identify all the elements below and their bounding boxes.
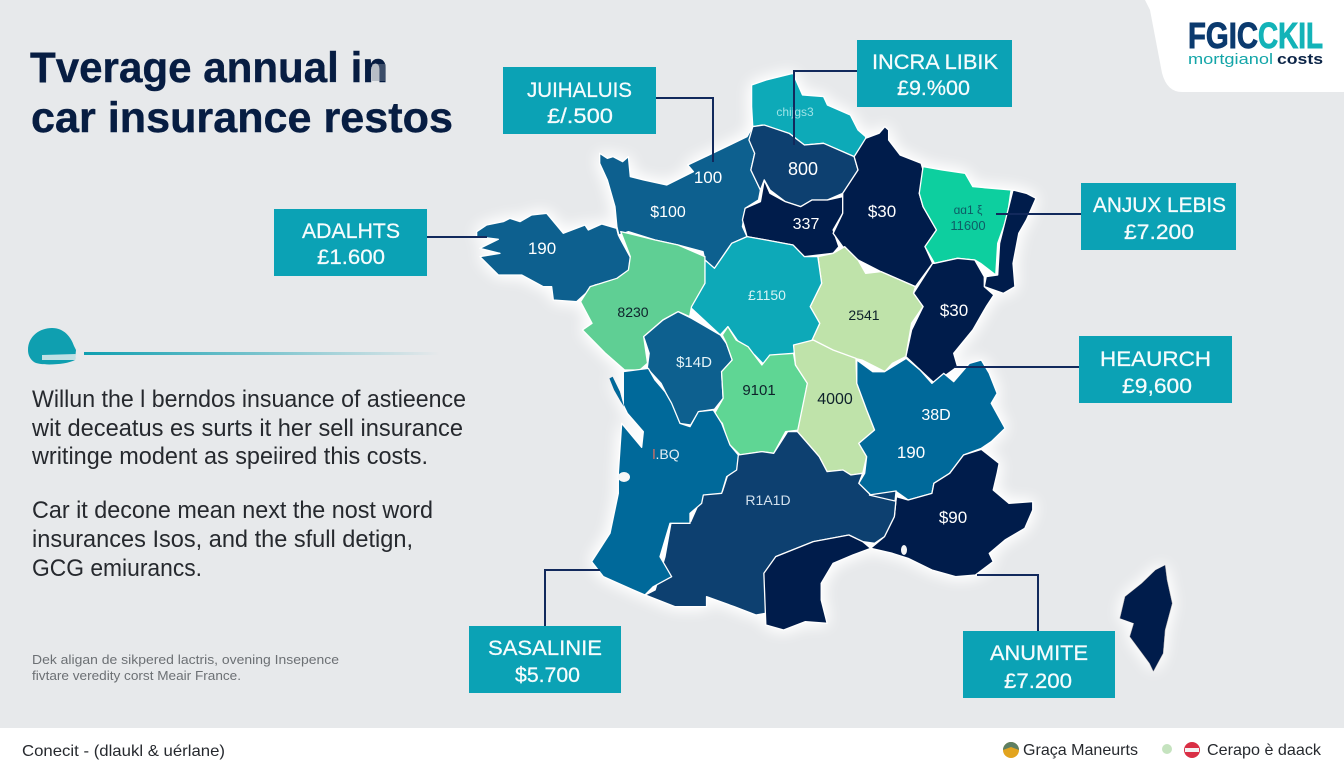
region: northwest blue: 100 — [694, 168, 722, 187]
region: centre navy — [742, 180, 843, 257]
logo panel: CKIL — [1258, 15, 1323, 56]
logo panel — [1145, 0, 1344, 92]
legend: footer icons and labels: Graça Maneurts — [1023, 742, 1138, 759]
region: southwest blue — [592, 368, 738, 595]
region: Corsica — [1120, 565, 1172, 672]
footnote: fivtare veredity corst Meair France. — [32, 668, 241, 683]
legend: footer icons and labels — [1003, 742, 1322, 759]
region: Limousin blue: $14D — [676, 354, 712, 371]
region: light green east centre: 2541 — [848, 307, 880, 323]
region: teal centre: £1150 — [748, 287, 786, 303]
intro paragraph: Willun the l berndos insuance of astieence — [32, 386, 466, 413]
region: teal centre — [690, 237, 822, 365]
logo panel: FGIC — [1188, 15, 1258, 56]
intro paragraph: writinge modent as speiired this costs. — [31, 443, 428, 470]
callout: SASALINIE — [469, 570, 621, 693]
region: Jura navy: $30 — [940, 301, 968, 320]
region: Alsace navy — [984, 190, 1036, 293]
region: Roussillon navy — [764, 535, 871, 630]
region: northeast navy: $30 — [868, 202, 896, 221]
region: central green: 9101 — [742, 382, 776, 399]
region: west green: 8230 — [617, 304, 649, 320]
region: Rhone blue — [857, 358, 1005, 500]
region: Oleron island strip — [609, 377, 624, 407]
region: Rhone blue: 190 — [897, 443, 925, 462]
region: Limousin blue — [644, 312, 732, 425]
map of France — [477, 73, 1172, 672]
region: light green east centre — [810, 247, 923, 372]
footer bar — [0, 728, 1344, 768]
title: car insurance restos — [31, 94, 453, 142]
second paragraph: GCG emiurancs. — [32, 555, 202, 582]
region: southwest blue: l.BQ — [652, 446, 680, 462]
title: Tverage annual in — [30, 44, 388, 92]
region: northwest blue — [600, 127, 760, 268]
region: southeast navy — [871, 449, 1033, 577]
callout: INCRA LIBIK: £9.%00 — [897, 77, 970, 100]
region: Paris north — [749, 125, 858, 207]
region: Rhone blue: 38D — [921, 407, 951, 424]
region: Brittany — [477, 213, 633, 302]
callout: ANJUX LEBIS — [996, 183, 1236, 250]
callout: ANJUX LEBIS: £7.200 — [1124, 221, 1194, 244]
callout: ANJUX LEBIS: ANJUX LEBIS — [1093, 194, 1226, 217]
footnote: Dek aligan de sikpered lactris, ovening Insepence — [32, 652, 339, 667]
callout: ADALHTS: ADALHTS — [302, 220, 400, 243]
callout: ADALHTS: £1.600 — [317, 246, 385, 269]
region: central light green — [794, 340, 875, 475]
icon: teal helmet with rule — [28, 328, 440, 364]
region: Jura navy — [906, 258, 994, 383]
logo panel: costs — [1277, 51, 1323, 68]
callout: HEAURCH — [955, 336, 1232, 403]
callout: INCRA LIBIK: INCRA LIBIK — [872, 51, 998, 74]
region: east green: 11600 — [950, 218, 986, 233]
callout: HEAURCH: HEAURCH — [1100, 348, 1211, 371]
region: east green — [919, 167, 1011, 275]
region: northwest blue: $100 — [650, 204, 686, 221]
callout: JUIHALUIS: £/.500 — [547, 105, 613, 128]
region: Paris north: 800 — [788, 159, 818, 179]
region: south blue: R1A1D — [745, 492, 791, 508]
region: south blue — [645, 432, 896, 615]
callout: JUIHALUIS — [503, 67, 713, 162]
callout: ADALHTS — [274, 209, 487, 276]
callout: SASALINIE: SASALINIE — [488, 637, 602, 660]
region: centre navy: 337 — [793, 216, 819, 233]
logo panel: mortgianol — [1188, 51, 1273, 68]
intro paragraph — [31, 386, 466, 470]
title — [30, 44, 453, 142]
region: Brittany: 190 — [528, 239, 556, 258]
callout: HEAURCH: £9,600 — [1122, 375, 1192, 398]
region: northeast navy — [833, 127, 936, 287]
footnote — [32, 652, 339, 683]
legend: footer icons and labels: Cerapo è daack — [1207, 742, 1322, 759]
callout: ANUMITE: ANUMITE — [990, 642, 1088, 665]
region: north teal — [752, 73, 866, 157]
callout: SASALINIE: $5.700 — [515, 664, 580, 687]
region: north teal: chijgs3 — [776, 105, 814, 119]
callout: JUIHALUIS: JUIHALUIS — [527, 79, 632, 102]
region: central light green: 4000 — [817, 391, 853, 408]
region: southeast navy: $90 — [939, 508, 967, 527]
second paragraph: Car it decone mean next the nost word — [32, 497, 433, 524]
callout: INCRA LIBIK — [794, 40, 1012, 145]
second paragraph: insurances Isos, and the sfull detign, — [32, 526, 413, 553]
callout: ANUMITE — [963, 575, 1115, 698]
second paragraph — [32, 497, 433, 582]
coastal details: bays and lagoon — [618, 472, 907, 555]
footer bar: Conecit - (dlaukl & uérlane) — [22, 743, 225, 760]
intro paragraph: wit deceatus es surts it her sell insurance — [31, 415, 463, 442]
region: east green: ɑɑ1 ξ — [954, 203, 983, 217]
region: central green — [714, 327, 807, 455]
region: west green — [581, 232, 705, 370]
callout: ANUMITE: £7.200 — [1004, 670, 1072, 693]
